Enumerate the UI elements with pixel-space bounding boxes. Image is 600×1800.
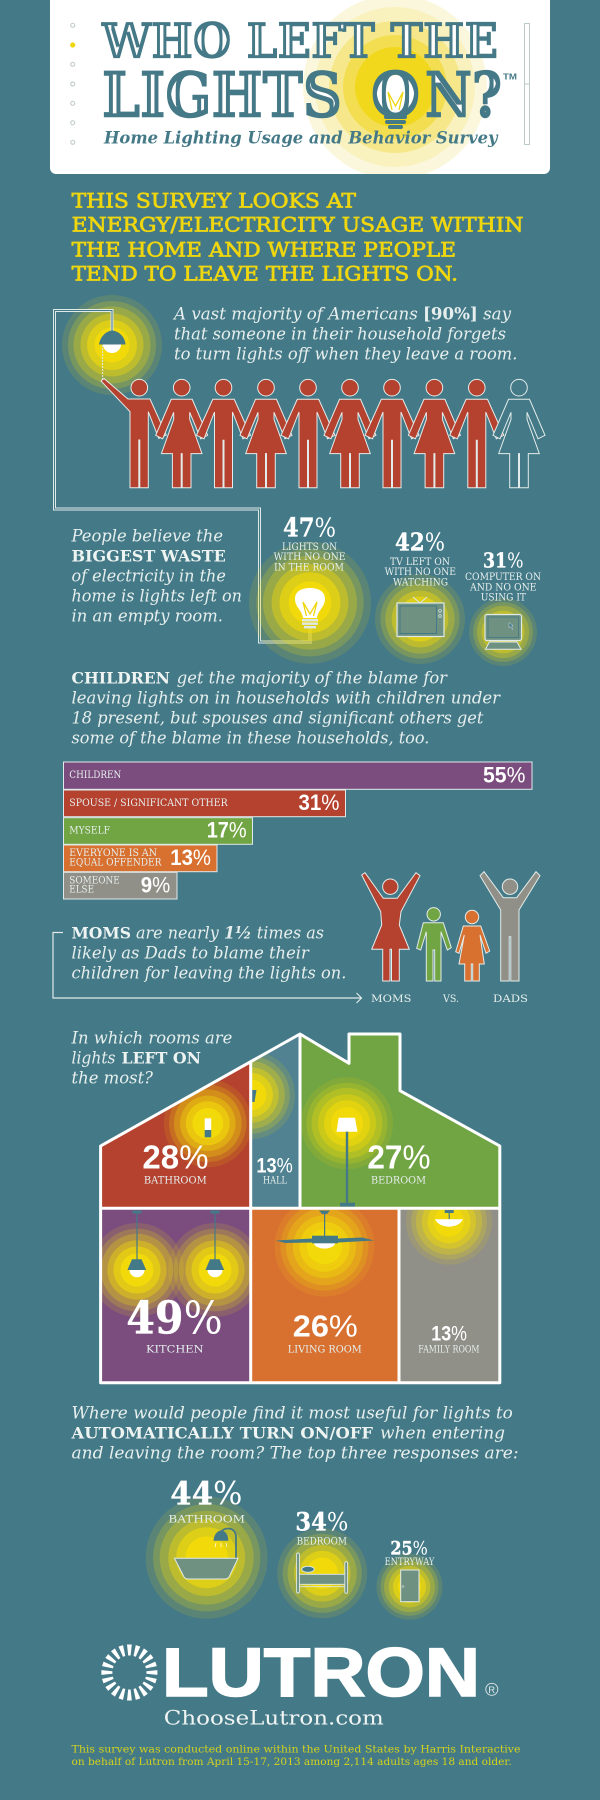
room: bathroom: BATHROOM xyxy=(144,1175,207,1186)
icon: mom xyxy=(362,873,420,981)
text: children blame xyxy=(72,668,501,748)
bar: myself: 17% xyxy=(207,818,247,843)
heading: intro text xyxy=(72,188,523,286)
stat: 31 percent computer: COMPUTER ON xyxy=(465,572,541,583)
heading: intro text: TEND TO LEAVE THE LIGHTS ON. xyxy=(72,262,458,286)
stat: 25 percent entryway: ENTRYWAY xyxy=(385,1557,435,1568)
chart: row of ten people xyxy=(101,378,545,488)
heading: intro text: THIS SURVEY LOOKS AT xyxy=(72,188,357,212)
panel: header xyxy=(50,0,550,179)
room: kitchen xyxy=(102,1210,250,1382)
slider xyxy=(524,24,530,144)
stat: 42 percent tv: WITH NO ONE xyxy=(385,567,456,578)
bar chart: who gets blamed xyxy=(64,762,532,899)
icon: header glow xyxy=(303,0,487,179)
family labels: MOMS xyxy=(371,994,412,1005)
text: moms: children for leaving the lights on. xyxy=(72,963,346,983)
text: which rooms: the most? xyxy=(72,1068,154,1088)
text: which rooms: In which rooms are xyxy=(71,1028,232,1048)
text: moms: MOMS xyxy=(72,923,131,942)
bar: children: 55% xyxy=(483,763,525,788)
stat: 42 percent tv: TV LEFT ON xyxy=(390,557,450,568)
title: WHO LEFT THE xyxy=(101,13,498,69)
text: automatically: when entering xyxy=(380,1423,505,1443)
text: 90 percent xyxy=(172,304,518,364)
room: kitchen: 49% xyxy=(126,1291,223,1344)
bar: children: CHILDREN xyxy=(69,770,122,781)
text: children blame: CHILDREN xyxy=(72,668,170,687)
room: family room xyxy=(400,1210,498,1382)
text: moms xyxy=(72,923,346,983)
bar: myself: MYSELF xyxy=(69,825,110,836)
text: children blame: get the majority of the blame for xyxy=(177,668,448,688)
url: ChooseLutron.com xyxy=(164,1705,384,1729)
icon: kitchen pendant lights xyxy=(127,1210,224,1277)
icon: hanging lamp xyxy=(99,330,126,380)
stat: 42 percent tv xyxy=(375,528,465,664)
room: living room: 26% xyxy=(293,1309,358,1344)
icon: door xyxy=(401,1570,419,1602)
stat: 34 percent bedroom: BEDROOM xyxy=(297,1536,347,1547)
bar: someone else: 9% xyxy=(141,872,170,897)
stat: 34 percent bedroom: 34% xyxy=(295,1508,348,1537)
family figures xyxy=(362,872,540,981)
text: which rooms xyxy=(71,1028,232,1088)
stat: 44 percent bathroom: 44% xyxy=(170,1474,242,1512)
heading: intro text: ENERGY/ELECTRICITY USAGE WITHIN xyxy=(72,213,523,237)
room: bedroom: BEDROOM xyxy=(371,1175,426,1186)
arrow: moms vs dads xyxy=(53,932,362,1003)
text: children blame: 18 present, but spouses and significant others get xyxy=(72,708,484,728)
bar: someone else: ELSE xyxy=(69,885,94,896)
icon: computer xyxy=(485,614,522,649)
text: 90 percent: to turn lights off when they leave a room. xyxy=(174,344,518,364)
stat: 42 percent tv: 42% xyxy=(395,528,445,557)
text: automatically: and leaving the room? The top three responses are: xyxy=(72,1443,519,1463)
heading: intro text: THE HOME AND WHERE PEOPLE xyxy=(72,237,456,261)
icon: bed xyxy=(297,1553,348,1593)
text: biggest waste: in an empty room. xyxy=(72,607,223,627)
registered mark: R xyxy=(488,1685,495,1696)
chart: house of rooms xyxy=(90,1034,500,1383)
text: which rooms: LEFT ON xyxy=(122,1048,201,1067)
title: LIGHTS xyxy=(102,59,342,132)
bar: everyone: EQUAL OFFENDER xyxy=(69,857,162,868)
logo: Lutron: LUTRON xyxy=(162,1634,480,1711)
icon: dad xyxy=(480,872,540,981)
text: which rooms: lights xyxy=(72,1048,116,1068)
stat: 44 percent bathroom xyxy=(146,1474,268,1619)
bar: someone else: SOMEONE xyxy=(69,875,120,886)
bar: myself xyxy=(64,818,252,844)
room: bedroom: 27% xyxy=(367,1138,430,1175)
stat: 47 percent lights on: 47% xyxy=(283,513,336,544)
room: family room: 13% xyxy=(431,1323,467,1346)
icon: tv xyxy=(397,597,444,636)
family labels: VS. xyxy=(442,994,459,1005)
text: biggest waste: of electricity in the xyxy=(72,567,226,587)
icon: bathtub xyxy=(174,1528,238,1579)
bar: spouse: SPOUSE / SIGNIFICANT OTHER xyxy=(69,798,228,809)
family labels: DADS xyxy=(493,994,528,1005)
icon: ceiling fan xyxy=(276,1210,374,1248)
stat: 47 percent lights on: IN THE ROOM xyxy=(274,562,344,573)
room: living room xyxy=(251,1197,399,1383)
stat: 47 percent lights on: LIGHTS ON xyxy=(282,542,337,553)
stat: 31 percent computer xyxy=(465,548,541,666)
title: O xyxy=(371,58,420,131)
navigation dots xyxy=(71,23,75,144)
icon: light bulb xyxy=(295,588,325,628)
text: 90 percent: A vast majority of Americans [90%] say xyxy=(172,304,511,324)
room: bedroom xyxy=(300,1034,500,1208)
icon: hall light xyxy=(252,1090,256,1102)
footnote: This survey was conducted online within the United States by Harris Interactive xyxy=(72,1744,521,1755)
text: biggest waste: BIGGEST WASTE xyxy=(72,547,226,566)
stat: 47 percent lights on xyxy=(249,513,371,664)
bar: everyone xyxy=(64,845,217,872)
icon: sunburst xyxy=(101,1644,157,1700)
icon: floor lamp xyxy=(336,1118,358,1207)
subtitle: Home Lighting Usage and Behavior Survey xyxy=(103,128,499,148)
text: moms: are nearly 1½ times as xyxy=(136,923,324,943)
footnote xyxy=(72,1744,521,1768)
text: biggest waste: People believe the xyxy=(71,527,223,547)
icon: bathroom light xyxy=(205,1118,211,1137)
icon: bulb base xyxy=(384,92,407,129)
bar: spouse xyxy=(64,790,346,817)
text: children blame: leaving lights on in households with children under xyxy=(72,688,501,708)
room: family room: FAMILY ROOM xyxy=(418,1345,480,1356)
text: moms: likely as Dads to blame their xyxy=(72,943,310,963)
stat: 25 percent entryway: 25% xyxy=(390,1537,428,1559)
icon: hanging lamp glow xyxy=(62,295,162,395)
title: N? xyxy=(425,59,502,132)
room: hall xyxy=(252,1037,298,1206)
registered mark xyxy=(486,1683,498,1696)
room: hall: HALL xyxy=(263,1175,287,1186)
room: bathroom: 28% xyxy=(142,1138,209,1175)
room: kitchen: KITCHEN xyxy=(146,1345,204,1356)
text: biggest waste xyxy=(71,527,242,627)
room: living room: LIVING ROOM xyxy=(288,1345,362,1356)
wire connector xyxy=(54,310,310,642)
bar: everyone: EVERYONE IS AN xyxy=(69,848,157,859)
icon: girl xyxy=(456,910,490,981)
title: TM xyxy=(503,72,517,82)
title xyxy=(101,13,517,132)
footnote: on behalf of Lutron from April 15-17, 2013 among 2,114 adults ages 18 and older. xyxy=(72,1757,512,1768)
family labels xyxy=(371,994,528,1005)
bar: spouse: 31% xyxy=(298,790,340,815)
text: children blame: some of the blame in these households, too. xyxy=(72,728,429,748)
bar: children xyxy=(64,762,532,789)
stat: 25 percent entryway xyxy=(376,1537,442,1620)
room: bathroom xyxy=(101,1062,252,1208)
text: automatically xyxy=(70,1403,519,1463)
stat: 31 percent computer: 31% xyxy=(483,548,524,572)
text: 90 percent: that someone in their household forgets xyxy=(174,324,506,344)
bar: someone else xyxy=(64,872,177,899)
icon: ceiling dome light xyxy=(435,1210,463,1227)
room: hall: 13% xyxy=(256,1155,293,1178)
text: automatically: Where would people find it most useful for lights to xyxy=(72,1403,513,1423)
icon: boy xyxy=(417,908,451,981)
stat: 31 percent computer: AND NO ONE xyxy=(469,582,536,593)
bar: everyone: 13% xyxy=(170,845,211,870)
stat: 34 percent bedroom xyxy=(277,1508,367,1618)
stat: 44 percent bathroom: BATHROOM xyxy=(168,1514,245,1525)
stat: 47 percent lights on: WITH NO ONE xyxy=(274,552,346,563)
house outline xyxy=(101,1034,500,1383)
stat: 31 percent computer: USING IT xyxy=(481,593,526,604)
stat: 42 percent tv: WATCHING xyxy=(393,577,448,588)
text: automatically: AUTOMATICALLY TURN ON/OFF xyxy=(70,1423,374,1442)
text: biggest waste: home is lights left on xyxy=(72,587,242,607)
